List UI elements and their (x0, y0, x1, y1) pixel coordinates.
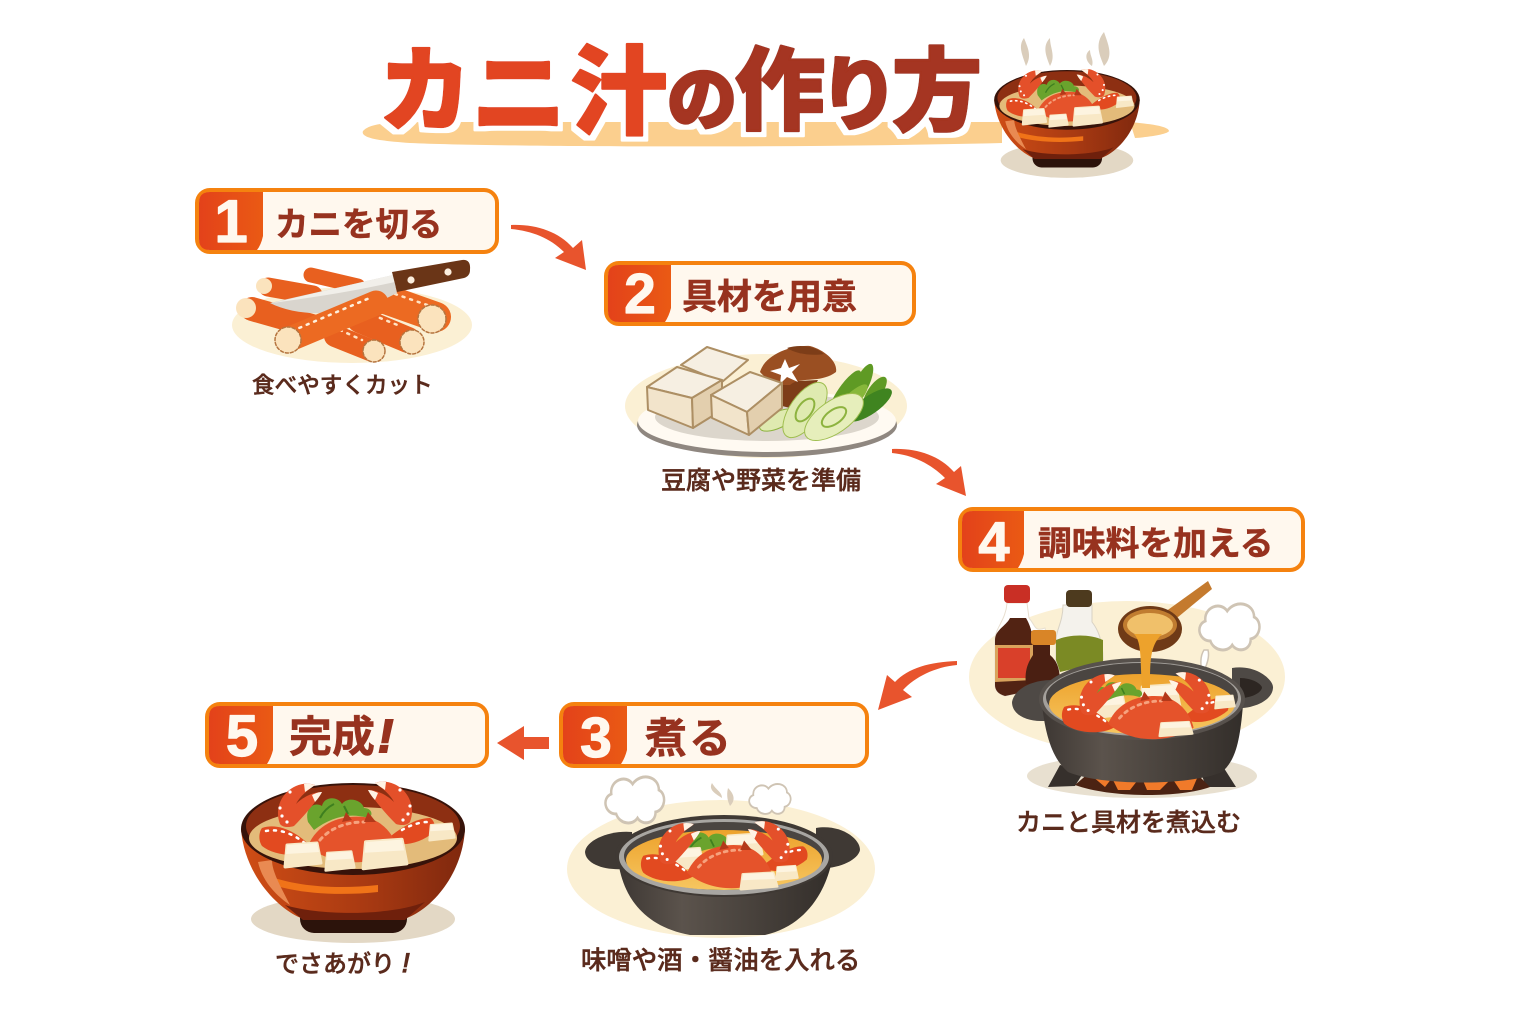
step 5 header: 5 (226, 704, 258, 769)
icon: tofu, mushroom and vegetables (625, 346, 907, 458)
icon: crab legs and knife (236, 260, 470, 362)
step 4 header: 調味料を加える (1038, 525, 1274, 563)
icon: steam cloud (1199, 604, 1259, 674)
icon: steam above title bowl (1021, 32, 1109, 66)
caption: ! (402, 948, 410, 978)
title: カ (379, 41, 471, 143)
step 3 header (561, 704, 867, 770)
step 4 header (960, 509, 1303, 573)
step 2 header (606, 262, 914, 326)
caption: カニと具材を煮込む (1016, 809, 1241, 837)
title: 方 (892, 43, 982, 143)
caption: 食べやすくカット (252, 373, 433, 398)
step 5 (207, 704, 487, 978)
icon: seasoning bottles (995, 585, 1103, 696)
step 2 (606, 262, 914, 495)
icon: shallow pot with crab (585, 815, 860, 935)
step 1 header: 1 (214, 188, 248, 255)
icon: title soup bowl (994, 69, 1140, 178)
step 3 header: 3 (580, 706, 612, 770)
title (379, 40, 982, 147)
icon: cream backdrop (232, 287, 472, 363)
step 3 (561, 704, 875, 975)
title: り (819, 51, 899, 140)
icon: cream backdrop (567, 800, 875, 938)
arrow: step 3 to 5 (497, 726, 549, 760)
title: ニ (472, 42, 566, 147)
arrow: step 4 to 3 (878, 661, 957, 710)
step 4 (960, 509, 1303, 837)
step 5 header: ! (378, 710, 393, 762)
arrow: step 2 to 4 (892, 449, 966, 496)
title: の (667, 61, 737, 139)
caption: 豆腐や野菜を準備 (661, 467, 861, 495)
step 2 header: 具材を用意 (682, 278, 857, 317)
icon: finished crab soup bowl (241, 782, 465, 943)
step 5 header (207, 704, 487, 769)
arrow: step 1 to 2 (511, 225, 586, 270)
step 5 header: 完成 (289, 714, 375, 762)
step 1 (197, 188, 497, 398)
icon: ladle pouring seasoning (1118, 581, 1212, 688)
caption: でさあがり (275, 951, 395, 978)
title: 作 (735, 42, 825, 142)
icon: pot on burner (1012, 658, 1273, 798)
icon: cream backdrop (969, 601, 1285, 753)
title banner (363, 122, 1169, 146)
caption: 味噌や酒・醤油を入れる (581, 947, 860, 975)
step 4 header: 4 (978, 510, 1010, 573)
step 1 header (197, 188, 497, 255)
icon: steam (605, 777, 791, 823)
step 1 header: カニを切る (275, 207, 442, 244)
title: 汁 (571, 40, 667, 147)
step 2 header: 2 (624, 262, 656, 326)
step 3 header: 煮る (645, 715, 733, 762)
